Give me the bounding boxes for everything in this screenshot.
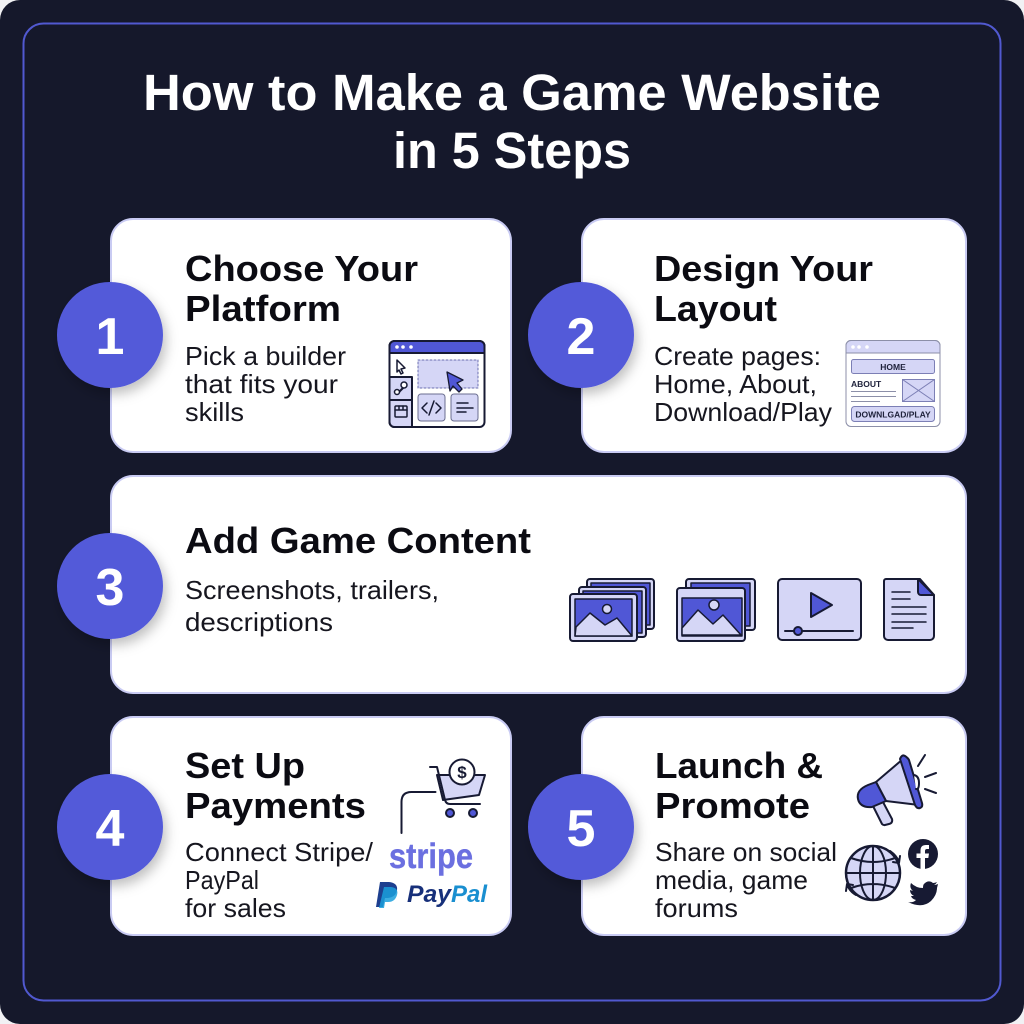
- step 1 number badge: 1: [96, 308, 124, 366]
- icon: shopping cart with dollar coin: [402, 760, 485, 833]
- title: [143, 64, 881, 179]
- step 5 heading: Launch &: [655, 745, 823, 786]
- step 5 heading: [655, 745, 823, 826]
- icon: megaphone: [858, 755, 936, 825]
- icon: page layout wireframe: ABOUT: [851, 379, 882, 389]
- step 3 heading: Add Game Content: [185, 520, 531, 561]
- step 2 heading: Design Your: [654, 248, 873, 289]
- step 5 description: media, game: [655, 865, 808, 895]
- step 4 description: Connect Stripe/: [185, 837, 374, 867]
- icon: document: [884, 579, 934, 640]
- step 5 heading: Promote: [655, 785, 810, 826]
- step 4 number badge: 4: [96, 800, 125, 858]
- step 4 heading: [185, 745, 366, 826]
- icon: twitter: [908, 881, 938, 905]
- step 1 heading: Platform: [185, 288, 341, 329]
- logo: paypal: Pal: [451, 881, 488, 908]
- step 3 description: Screenshots, trailers,: [185, 575, 439, 605]
- step 1 heading: Choose Your: [185, 248, 418, 289]
- step 5 description: [655, 837, 837, 923]
- title: in 5 Steps: [393, 122, 631, 179]
- panel: step 3 add game content: [57, 476, 966, 693]
- logo: stripe: stripe: [389, 837, 473, 876]
- icon: globe with arrows: [846, 846, 900, 900]
- icon: screenshot stack of two: [677, 579, 755, 641]
- logo: paypal: Pay: [407, 881, 453, 908]
- panel: step 2 design your layout: [528, 219, 966, 452]
- step 1 heading: [185, 248, 418, 329]
- step 2 description: Create pages:: [654, 341, 821, 371]
- panel: step 5 launch and promote: [528, 717, 966, 935]
- step 3 description: descriptions: [185, 607, 333, 637]
- step 3 description: [185, 575, 439, 637]
- step 4 number badge: [57, 774, 163, 880]
- icon: screenshot stack of three: [570, 579, 654, 641]
- step 2 description: Home, About,: [654, 369, 817, 399]
- icon: video player: [778, 579, 861, 640]
- step 1 description: skills: [185, 397, 244, 427]
- step 4 description: PayPal: [185, 865, 259, 895]
- step 1 description: Pick a builder: [185, 341, 346, 371]
- step 2 description: [654, 341, 832, 427]
- step 3 number badge: [57, 533, 163, 639]
- step 4 heading: Payments: [185, 785, 366, 826]
- panel: step 4 set up payments: [57, 717, 511, 935]
- step 4 heading: Set Up: [185, 745, 305, 786]
- step 2 number badge: 2: [567, 308, 595, 366]
- step 5 description: forums: [655, 893, 738, 923]
- icon: page layout wireframe: HOME: [880, 362, 906, 372]
- step 5 description: Share on social: [655, 837, 837, 867]
- step 2 number badge: [528, 282, 634, 388]
- step 1 description: [185, 341, 346, 427]
- step 2 heading: [654, 248, 873, 329]
- step 2 heading: Layout: [654, 288, 777, 329]
- icon: website builder window: [390, 341, 484, 427]
- panel: step 1 choose your platform: [57, 219, 511, 452]
- step 4 description: for sales: [185, 893, 286, 923]
- icon: facebook: [908, 839, 938, 869]
- step 3 number badge: 3: [96, 559, 124, 617]
- step 1 description: that fits your: [185, 369, 338, 399]
- step 2 description: Download/Play: [654, 397, 832, 427]
- step 4 description: [185, 837, 374, 923]
- title: How to Make a Game Website: [143, 64, 881, 121]
- step 1 number badge: [57, 282, 163, 388]
- icon: shopping cart with dollar coin: $: [457, 763, 467, 782]
- icon: page layout wireframe: DOWNLGAD/PLAY: [855, 410, 931, 420]
- step 5 number badge: [528, 774, 634, 880]
- logo: paypal: [376, 881, 488, 908]
- icon: page layout wireframe: [846, 340, 940, 426]
- step 5 number badge: 5: [567, 800, 595, 858]
